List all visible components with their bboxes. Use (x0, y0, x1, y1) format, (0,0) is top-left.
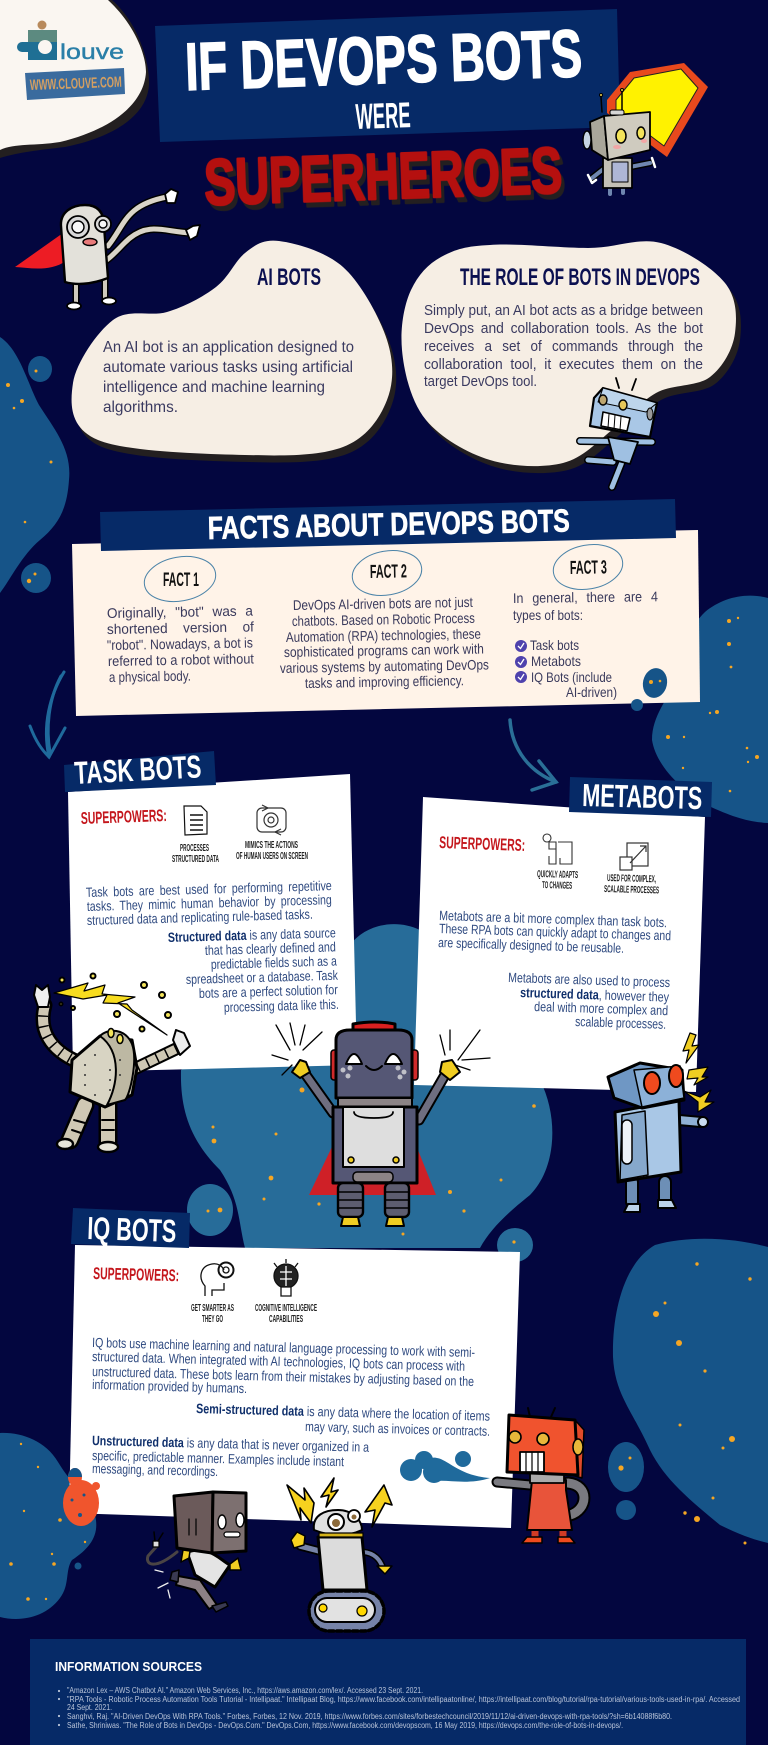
icon captions: CAPABILITIES (269, 1314, 303, 1325)
body text: An AI bot is an application designed to (103, 339, 354, 356)
fact 2: FACT 2 (370, 561, 407, 583)
body text: structured data and replicating rule-based tasks. (87, 907, 313, 928)
body text (92, 1335, 490, 1479)
background blob: centre (181, 924, 552, 1262)
icon captions (172, 840, 308, 865)
section: facts panel (72, 499, 700, 716)
banner (569, 777, 712, 817)
body text: predictable fields such as a (211, 953, 337, 972)
body text: DevOps and collaboration tools. As the bot (424, 321, 703, 337)
website badge (25, 68, 125, 100)
body text: Structured data is any data source (168, 925, 336, 945)
icon: orange planet (63, 1468, 100, 1526)
icon captions: THEY GO (202, 1314, 223, 1325)
title banner (155, 9, 620, 142)
fact 2: tasks and improving efficiency. (305, 672, 464, 691)
body text: Semi-structured data is any data where the location of items (196, 1401, 490, 1424)
fact 2: sophisticated programs can work with (284, 641, 484, 660)
fact 1 (107, 551, 254, 685)
superpowers label: SUPERPOWERS: (439, 833, 525, 855)
body text: Unstructured data is any data that is never organized in a (92, 1433, 370, 1455)
banner (71, 1208, 190, 1249)
body text: deal with more complex and (534, 999, 668, 1018)
icon: scaling (620, 843, 648, 870)
icon: gear process (257, 805, 286, 835)
background blob: lower right (608, 1239, 768, 1544)
icon captions: MIMICS THE ACTIONS (245, 840, 298, 851)
panel: task bots: OF HUMAN USERS ON SCREEN (236, 851, 308, 862)
body text: Task bots are best used for performing repetitive (86, 878, 332, 900)
fact 2: various systems by automating DevOps (280, 656, 489, 676)
fact 3: AI-driven) (566, 684, 617, 700)
body text (103, 339, 354, 416)
panel: task bots (64, 748, 357, 1072)
fact 3: IQ Bots (include (531, 669, 612, 685)
body text: specific, predictable manner. Examples include instant (92, 1448, 344, 1469)
banner: TASK BOTS (73, 748, 202, 791)
body text: receives a set of commands through the (424, 339, 703, 355)
title line 1: IF DEVOPS BOTS (184, 16, 583, 105)
body text: may vary, such as invoices or contracts. (305, 1419, 490, 1439)
body text: messaging, and recordings. (92, 1461, 218, 1479)
heading: INFORMATION SOURCES (55, 1659, 202, 1674)
body text: Metabots are a bit more complex than task bots. (439, 908, 667, 930)
fact 2: chatbots. Based on Robotic Process (292, 610, 475, 629)
body text: automate various tasks using artificial (103, 359, 353, 376)
icon: document (184, 806, 207, 835)
robot: box head running (147, 1492, 246, 1612)
fact 1: referred to a robot without (108, 650, 254, 669)
robot: shield hero top right (583, 63, 708, 194)
panel: role of bots (401, 241, 741, 473)
source list: 24 Sept. 2021. (67, 1703, 112, 1712)
panel: metabots: SCALABLE PROCESSES (604, 884, 659, 896)
icon captions (191, 1303, 317, 1325)
robot: blue red-eyed (608, 1033, 714, 1212)
logo wordmark: louve (60, 41, 124, 64)
icon: light bulb brain (274, 1259, 298, 1296)
body text: IQ bots use machine learning and natural language processing to work with semi- (92, 1335, 475, 1360)
arrow: left decorative (30, 672, 65, 757)
icon: head with gear (201, 1262, 234, 1296)
fact 3: Metabots (531, 653, 581, 669)
fact 3: Task bots (530, 637, 579, 653)
banner: IQ BOTS (87, 1210, 177, 1249)
robot: caped stretchy arms (15, 189, 200, 310)
body text: Metabots are also used to process (508, 970, 670, 990)
superpowers label: SUPERPOWERS: (93, 1264, 179, 1285)
robot: lightning tread (287, 1478, 392, 1631)
body text: scalable processes. (575, 1014, 666, 1032)
panel: information sources (30, 1639, 746, 1745)
fact 2: DevOps AI-driven bots are not just (293, 594, 473, 613)
body text (424, 303, 703, 390)
body text: These RPA bots can quickly adapt to changes and (439, 921, 671, 943)
body text: structured data, however they (520, 985, 670, 1005)
background blob: lower left (0, 1433, 96, 1619)
robot: task lightning (34, 974, 190, 1152)
title: superheroes: SUPERHEROES (203, 134, 563, 219)
heading: AI BOTS (257, 264, 321, 291)
icon: puzzle logo mark (17, 20, 57, 60)
logo panel (0, 0, 149, 158)
icon captions: TO CHANGES (542, 880, 572, 892)
icon captions: QUICKLY ADAPTS (537, 869, 578, 881)
icon captions: STRUCTURED DATA (172, 854, 219, 865)
fact 1: shortened version of (107, 618, 254, 637)
title line 2: WERE (355, 94, 411, 137)
body text: Simply put, an AI bot acts as a bridge between (424, 303, 703, 319)
source list (58, 1686, 740, 1730)
body text: are specifically designed to be reusable. (438, 935, 624, 956)
background blob: right of facts (652, 596, 768, 823)
body text: target DevOps tool. (424, 374, 537, 390)
source list: "Amazon Lex – AWS Chatbot AI." Amazon Web Services, Inc., https://aws.amazon.com/lex/. Accessed 23 Sept. 2021. (67, 1686, 423, 1695)
fact 1: Originally, "bot" was a (107, 602, 253, 621)
body text (438, 908, 671, 1032)
panel: AI bots (72, 241, 396, 462)
fact 3 (513, 539, 658, 700)
body text: information provided by humans. (92, 1377, 247, 1396)
icon: wind cloud (400, 1451, 490, 1483)
fact 3: types of bots: (513, 607, 583, 623)
panel: metabots: USED FOR COMPLEX, (607, 873, 656, 885)
source list: Sathe, Shriniwas. "The Role of Bots in DevOps - DevOps.Com." DevOps.Com, https://www.facebook.com/devopscom, 16 May 2019, https://devops.com/the-role-of-bots-in-devops/. (67, 1721, 623, 1730)
fact 1: "robot". Nowadays, a bot is (107, 634, 253, 653)
body text: that has clearly defined and (205, 939, 336, 958)
banner (64, 748, 216, 792)
body text: processing data like this. (224, 997, 339, 1015)
fact 2 (280, 545, 489, 691)
fact 3: FACT 3 (570, 557, 607, 579)
robot: caped centre hero (272, 1022, 490, 1226)
body text (86, 878, 339, 1015)
icon captions: GET SMARTER AS (191, 1303, 234, 1314)
banner: METABOTS (582, 777, 703, 816)
decorative spots over panel (631, 666, 670, 711)
panel: IQ bots (69, 1208, 520, 1528)
fact 1: FACT 1 (163, 570, 199, 591)
body text: intelligence and machine learning (103, 379, 325, 396)
robot: red pointing (497, 1408, 584, 1543)
panel: metabots (414, 777, 712, 1092)
body text: algorithms. (103, 399, 178, 416)
fact 1: a physical body. (109, 668, 191, 685)
panel: IQ bots: COGNITIVE INTELLIGENCE (255, 1303, 317, 1314)
website badge: WWW.CLOUVE.COM (30, 74, 122, 94)
body text: bots are a perfect solution for (199, 982, 338, 1001)
body text: unstructured data. These bots learn from their mistakes by adjusting based on the (92, 1364, 474, 1389)
background blob: upper left (0, 337, 69, 593)
body text: tasks. They mimic human behavior by processing (87, 892, 332, 914)
icon captions: PROCESSES (180, 843, 209, 854)
arrow: right decorative (510, 720, 556, 790)
body text: spreadsheet or a database. Task (186, 968, 338, 987)
icon captions (537, 869, 659, 896)
robot: blue falling (580, 378, 657, 487)
fact 3: In general, there are 4 (513, 588, 658, 606)
fact 2: Automation (RPA) technologies, these (286, 626, 481, 645)
facts banner: FACTS ABOUT DEVOPS BOTS (207, 502, 570, 546)
body text: structured data. When integrated with AI technologies, IQ bots can process with (92, 1349, 465, 1374)
icon: puzzle (543, 834, 572, 864)
source list: Sanghvi, Raj. "AI-Driven DevOps With RPA Tools." Forbes, Forbes, 12 Nov. 2019, https://www.forbes.com/sites/forbestechcouncil/2019/11/12/ai-driven-devops-with-rpa-tools/?sh=6b14088f6b80. (67, 1712, 672, 1721)
superpowers label: SUPERPOWERS: (80, 806, 167, 828)
body text: collaboration tool, it executes them on the (424, 357, 703, 373)
